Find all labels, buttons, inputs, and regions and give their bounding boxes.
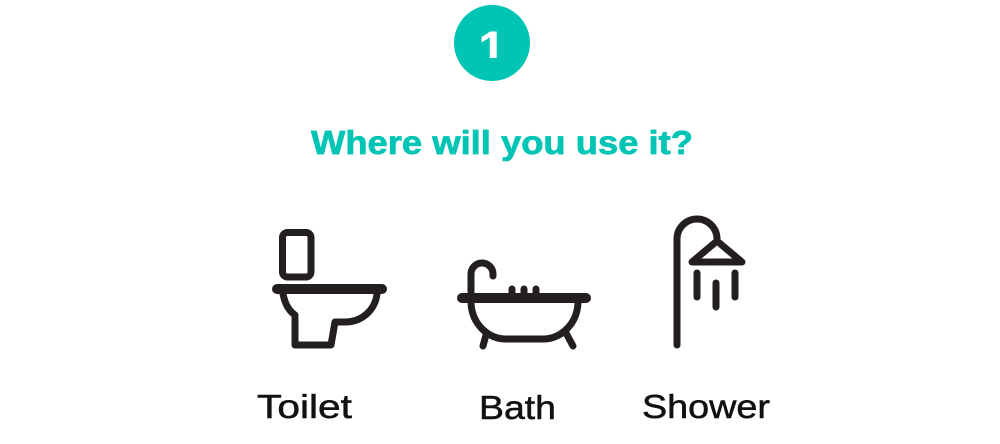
icon: bath	[462, 263, 586, 346]
icon: shower	[677, 219, 742, 345]
step number badge: 1	[478, 21, 506, 77]
infographic	[258, 5, 770, 420]
icon: toilet	[277, 232, 382, 345]
label: shower: Shower	[642, 388, 770, 425]
label: toilet: Toilet	[257, 388, 352, 425]
heading: Where will you use it?	[311, 124, 693, 161]
label: bath: Bath	[479, 389, 556, 426]
step number badge	[454, 5, 530, 81]
